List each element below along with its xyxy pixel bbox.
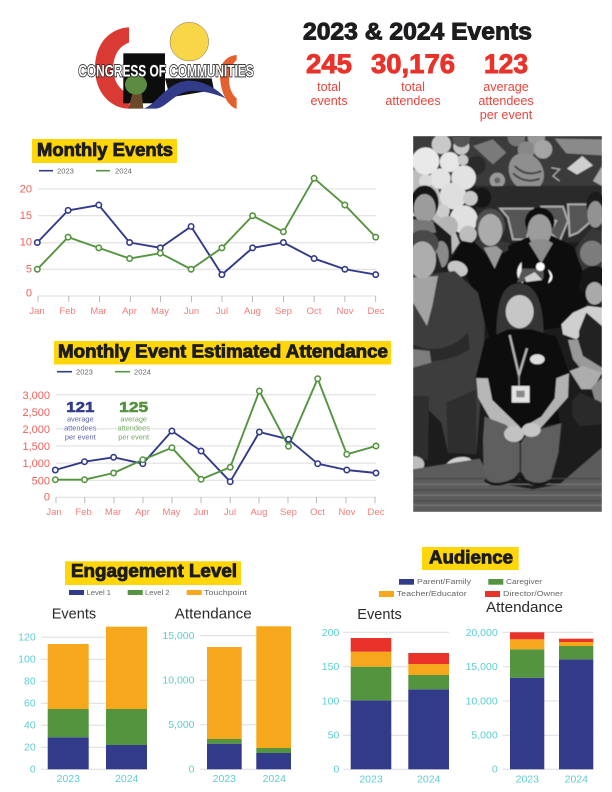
line chart: monthly events: 20 (20, 184, 32, 196)
floor (413, 448, 602, 512)
line chart: monthly events: Apr (122, 306, 137, 317)
stacked bar chart: audience events: 100 (322, 696, 339, 708)
heading: Monthly Event Estimated Attendance: Monthly Event Estimated Attendance (58, 342, 388, 362)
left front woman (413, 230, 486, 472)
line chart: monthly events: 5 (26, 264, 32, 276)
line chart: monthly attendance: May (163, 507, 181, 518)
stat: total events: events (310, 94, 348, 108)
foreground woman (476, 283, 570, 487)
middle woman (446, 208, 512, 338)
legend: engagement level: Touchpoint (204, 588, 248, 597)
line chart: monthly attendance: 2,000 (22, 424, 50, 436)
photo: group of women, black and white (404, 129, 609, 512)
line chart: monthly attendance: 500 (32, 476, 50, 488)
stacked bar chart: engagement attendance: 2023 (213, 773, 236, 785)
far right woman (576, 192, 602, 271)
stacked bar chart: audience attendance: 0 (492, 764, 498, 776)
stacked bar chart: engagement events: 0 (30, 764, 36, 776)
chart heading: engagement events: Events (52, 606, 96, 623)
line chart: monthly events: Aug (244, 306, 261, 317)
callout: 2023 average attendees: average (67, 415, 94, 424)
legend: engagement level: Level 2 (145, 588, 170, 597)
legend: monthly events (39, 166, 132, 175)
legend: audience (379, 577, 564, 598)
stacked bar chart: audience events (322, 627, 449, 785)
stat: total events: 245 (306, 49, 352, 79)
back left woman (411, 185, 452, 269)
stat: average attendees per event: attendees (478, 94, 534, 108)
legend: audience: Parent/Family (417, 577, 471, 586)
stat: average attendees per event: per event (480, 108, 533, 122)
line chart: monthly attendance: 3,000 (22, 390, 50, 402)
heading: Monthly Events: Monthly Events (37, 140, 173, 160)
line chart: monthly attendance: Nov (339, 507, 356, 518)
chart heading: audience events: Events (357, 606, 402, 623)
stacked bar chart: engagement events: 2024 (115, 773, 139, 785)
stat: average attendees per event: 123 (484, 49, 528, 79)
centre right woman (508, 207, 589, 333)
chart heading: audience attendance: Attendance (486, 599, 563, 616)
line chart: monthly attendance: 0 (44, 492, 50, 504)
line chart: monthly attendance: Oct (310, 507, 325, 518)
legend: audience: Teacher/Educator (397, 589, 467, 598)
stacked bar chart: engagement events (18, 627, 147, 785)
stacked bar chart: engagement attendance: 0 (189, 764, 195, 776)
logo: Congress of Communities: CONGRESS OF COMMUNITIES (78, 61, 254, 80)
legend: engagement level: Level 1 (86, 588, 111, 597)
stacked bar chart: audience attendance (466, 627, 593, 785)
line chart: monthly events: Mar (90, 306, 107, 317)
stat: total events (306, 49, 352, 108)
stat: total attendees: total (401, 80, 425, 94)
line chart: monthly events: 15 (20, 210, 32, 222)
legend: monthly attendance: 2023 (76, 367, 93, 376)
stacked bar chart: engagement attendance: 15,000 (162, 630, 195, 642)
callout: 2024 average attendees: average (120, 415, 147, 424)
line chart: monthly events: Sep (275, 306, 292, 317)
stacked bar chart: engagement events: 120 (18, 632, 36, 644)
stat: total attendees: attendees (385, 94, 441, 108)
line chart: monthly attendance: Jun (193, 507, 209, 518)
stat: total events: total (317, 80, 341, 94)
callout: 2023 average attendees: attendees (64, 424, 97, 433)
line chart: monthly attendance: Apr (135, 507, 150, 518)
line chart: monthly events: Nov (337, 306, 354, 317)
line chart: monthly events: Dec (368, 306, 385, 317)
stacked bar chart: engagement events: 40 (24, 720, 36, 732)
stacked bar chart: audience events: 200 (322, 627, 339, 639)
line chart: monthly attendance: Sep (280, 507, 297, 518)
line chart: monthly attendance: Mar (105, 507, 121, 518)
line chart: monthly events: 10 (20, 236, 32, 248)
stacked bar chart: engagement events: 100 (18, 654, 36, 666)
logo: Congress of Communities (78, 22, 254, 109)
heading: Audience: Audience (429, 548, 513, 568)
stacked bar chart: engagement events: 20 (24, 742, 36, 754)
stacked bar chart: engagement attendance: 5,000 (168, 719, 195, 731)
stacked bar chart: audience attendance: 15,000 (466, 661, 498, 673)
legend: monthly events: 2023 (57, 166, 74, 175)
line chart: monthly attendance: Jan (46, 507, 62, 518)
line chart: monthly events: Feb (59, 306, 76, 317)
callout: 2023 average attendees (64, 399, 97, 442)
lower right woman (560, 266, 602, 426)
line chart: monthly attendance: 1,000 (22, 458, 50, 470)
callout: 2023 average attendees: 121 (66, 399, 94, 416)
legend: audience: Caregiver (506, 577, 543, 586)
stacked bar chart: audience attendance: 20,000 (466, 627, 498, 639)
stacked bar chart: audience attendance: 2024 (565, 773, 588, 785)
line chart: monthly events: Oct (307, 306, 322, 317)
chart heading: engagement attendance: Attendance (175, 606, 252, 623)
line chart: monthly attendance: Dec (368, 507, 385, 518)
line chart: monthly events (20, 176, 385, 317)
stacked bar chart: engagement events: 2023 (57, 773, 80, 785)
stacked bar chart: engagement attendance (162, 626, 291, 785)
line chart: monthly attendance: 1,500 (22, 441, 50, 453)
stat: average attendees per event (478, 49, 534, 122)
callout: 2024 average attendees: per event (118, 433, 149, 442)
stacked bar chart: audience attendance: 2023 (516, 773, 539, 785)
legend: monthly attendance: 2024 (134, 367, 151, 376)
stacked bar chart: audience attendance: 10,000 (466, 696, 498, 708)
line chart: monthly attendance: Jul (224, 507, 236, 518)
callout: 2024 average attendees (117, 399, 150, 442)
stacked bar chart: audience events: 2024 (417, 773, 441, 785)
line chart: monthly attendance: Feb (75, 507, 92, 518)
line chart: monthly events: Jun (184, 306, 199, 317)
stat: average attendees per event: average (483, 80, 529, 94)
line chart: monthly events: May (151, 306, 169, 317)
line chart: monthly events: Jul (216, 306, 228, 317)
heading: Engagement Level: Engagement Level (71, 561, 237, 581)
line chart: monthly events: 0 (26, 288, 32, 300)
stacked bar chart: engagement attendance: 10,000 (162, 674, 195, 686)
stacked bar chart: audience events: 150 (322, 661, 339, 673)
legend: audience: Director/Owner (503, 589, 564, 598)
callout: 2024 average attendees: attendees (117, 424, 150, 433)
line chart: monthly attendance: 2,500 (22, 407, 50, 419)
line chart: monthly attendance: Aug (251, 507, 267, 518)
callout: 2023 average attendees: per event (65, 433, 96, 442)
stacked bar chart: engagement events: 80 (24, 676, 36, 688)
stacked bar chart: engagement events: 60 (24, 698, 36, 710)
stacked bar chart: audience events: 50 (328, 730, 339, 742)
stacked bar chart: audience attendance: 5,000 (471, 730, 498, 742)
stat: total attendees: 30,176 (371, 49, 455, 79)
legend: monthly events: 2024 (115, 166, 132, 175)
line chart: monthly events: Jan (29, 306, 45, 317)
stacked bar chart: audience events: 2023 (359, 773, 383, 785)
line chart: monthly attendance (22, 376, 385, 518)
stacked bar chart: audience events: 0 (333, 764, 339, 776)
legend: monthly attendance (57, 367, 151, 376)
callout: 2024 average attendees: 125 (119, 399, 148, 416)
stat: total attendees (371, 49, 455, 108)
legend: engagement level (69, 588, 248, 597)
title: 2023 & 2024 Events (303, 18, 532, 46)
stacked bar chart: engagement attendance: 2024 (263, 773, 286, 785)
